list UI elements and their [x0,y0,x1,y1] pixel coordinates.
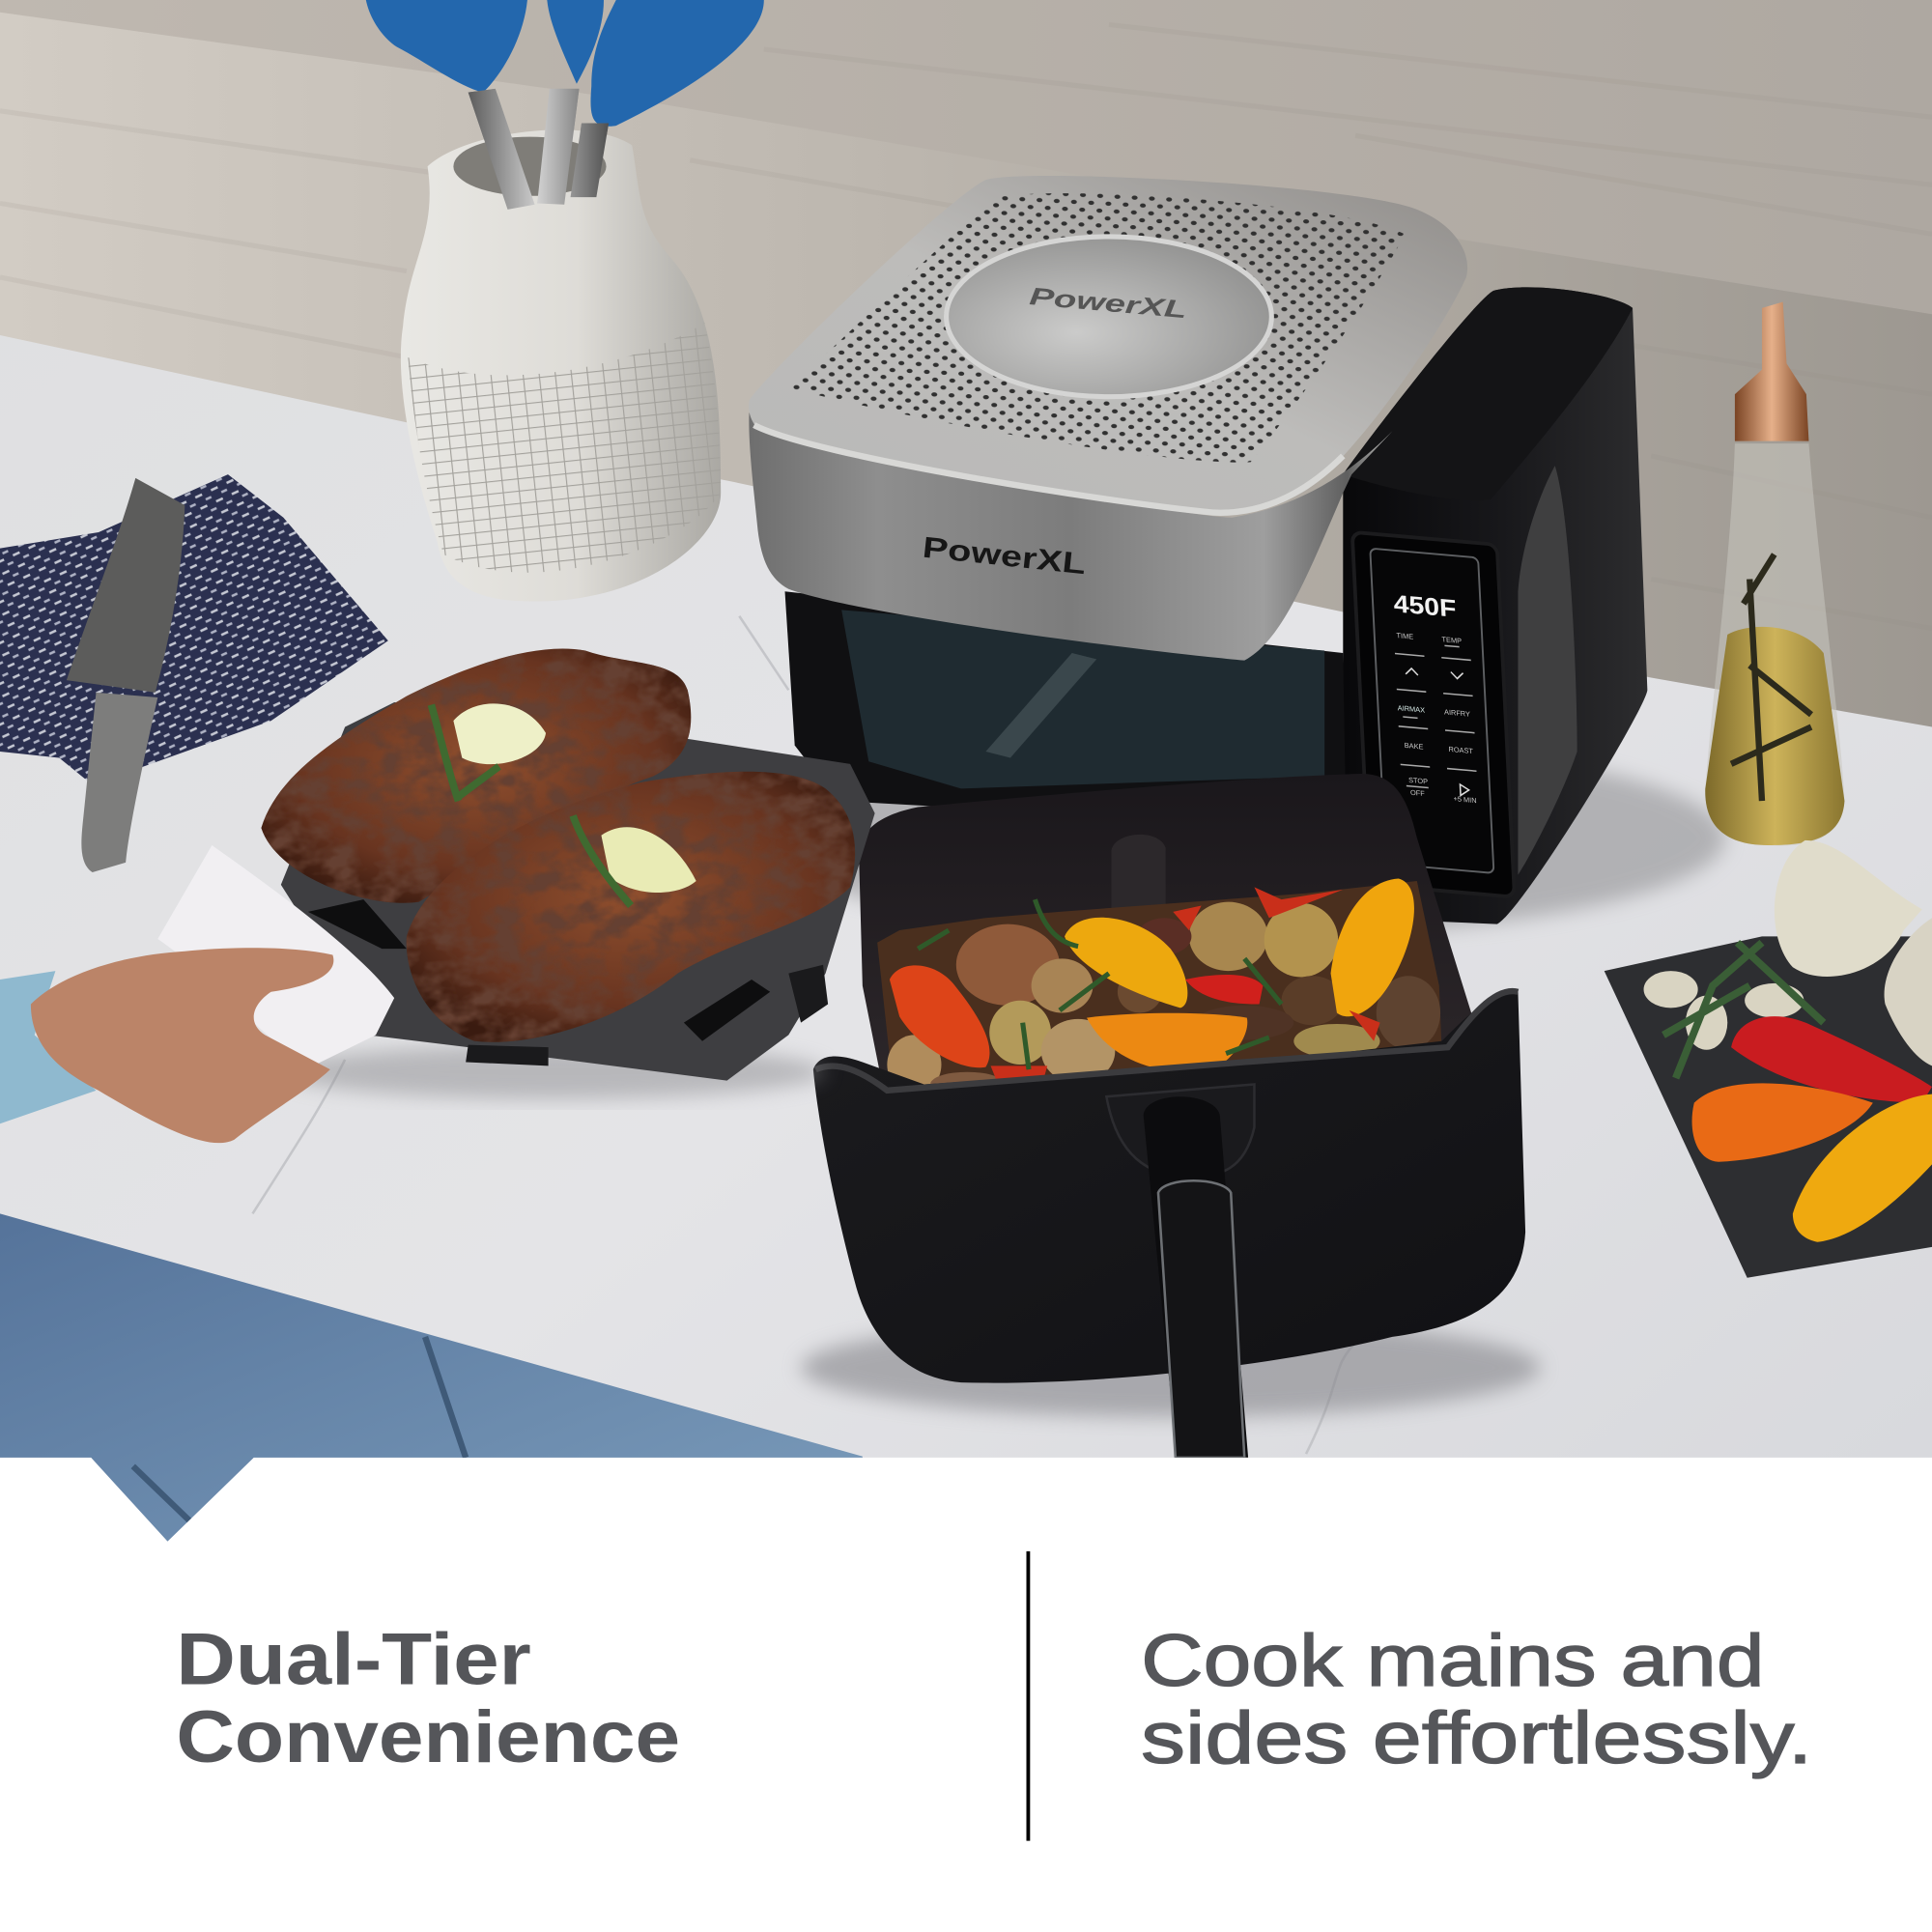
copper pourer [1735,301,1808,441]
handles in vase [469,89,609,210]
slate board [1605,936,1932,1278]
yellow pepper [1793,1094,1932,1242]
lid logo: PowerXL [1029,283,1188,324]
potatoes [887,902,1440,1096]
heading: dual-tier convenience: Convenience [176,1696,680,1778]
handle highlight [1158,1180,1244,1458]
control labels: ROAST [1448,745,1474,755]
basket shadow [801,1319,1540,1417]
temperature display: 450F [1393,590,1457,623]
red pepper [1731,1016,1932,1103]
tower top face [1343,287,1633,500]
air fryer basket [813,774,1525,1458]
window reflection [985,653,1096,757]
garlic bulbs [1775,840,1922,977]
chevrons and start icon [1406,668,1469,796]
tower side glass [1518,466,1577,875]
garlic and peppers [1644,840,1932,1242]
steaks [261,649,855,1042]
blue cabinet [0,1213,863,1552]
marble veins [252,616,1355,1454]
blue silicone heads [366,0,764,127]
basket back tab [1112,835,1166,918]
steel handles [468,89,609,139]
sleeve [0,971,96,1123]
hand with towel [0,845,394,1143]
navy dish towel [0,474,388,784]
utensils [365,0,764,139]
vase weave band [408,323,721,573]
peppers [890,965,989,1067]
herb butter [453,703,546,764]
rear steak crust [261,649,691,903]
lid edge highlight [754,425,1343,513]
basket rim [815,991,1518,1091]
caption panel [176,1551,1812,1841]
olive oil [1705,627,1844,845]
rosemary in bottle [1731,554,1811,801]
perforations [788,193,1405,463]
heading: dual-tier convenience: Dual-Tier [176,1619,531,1701]
control labels: AIRMAX [1398,703,1425,715]
cabinet door gap [133,1337,466,1534]
upper wall tile [0,0,1932,314]
rear steak [261,649,691,903]
body: cook mains and sides: Cook mains and [1141,1620,1765,1702]
control labels: TIME [1396,631,1413,641]
window housing [784,591,1346,807]
white cloth [157,845,394,1067]
wall backsplash [0,0,1932,727]
white ceramic vase [401,89,721,602]
steak tray shadow [283,1045,826,1099]
basket handle [1144,1096,1248,1458]
control labels: AIRFRY [1444,707,1470,719]
control labels: TEMP [1441,635,1462,645]
front steak [407,772,855,1042]
garlic cloves [1644,971,1698,1008]
control labels: BAKE [1405,741,1424,752]
front steak crust [407,772,855,1042]
control labels [1394,631,1477,805]
control labels: OFF [1410,788,1425,798]
orange pepper [1692,1083,1873,1162]
glass panel [1352,532,1515,897]
kitchen knife [67,478,185,872]
rosemary [1663,943,1824,1078]
front logo: PowerXL [921,531,1088,581]
caption divider [1026,1551,1030,1841]
marble countertop [0,335,1932,1458]
body: cook mains and sides: sides effortlessly. [1141,1697,1812,1779]
black control tower [1343,287,1647,924]
handle mount [1106,1084,1254,1177]
rosemary sprigs [431,705,631,906]
heading: dual-tier convenience [176,1619,680,1778]
body: cook mains and sides [1141,1620,1812,1779]
control labels: STOP [1408,776,1428,786]
control dividers [1394,641,1478,792]
lid disc [947,237,1271,397]
oil bottle [1705,301,1844,845]
rosemary [918,899,1282,1069]
control panel [1352,532,1515,897]
steel front [749,412,1392,661]
air fryer [749,176,1647,924]
basket interior [859,774,1491,1109]
dark glass window [841,610,1324,788]
roasted vegetables [877,878,1441,1096]
crisper tray [281,702,875,1081]
hand [31,948,333,1143]
basket body [813,991,1525,1383]
wall grain [0,108,230,325]
control labels: +5 MIN [1453,794,1477,805]
steel lid top [749,176,1467,516]
air fryer shadow [847,765,1732,936]
vase mouth [453,137,607,196]
